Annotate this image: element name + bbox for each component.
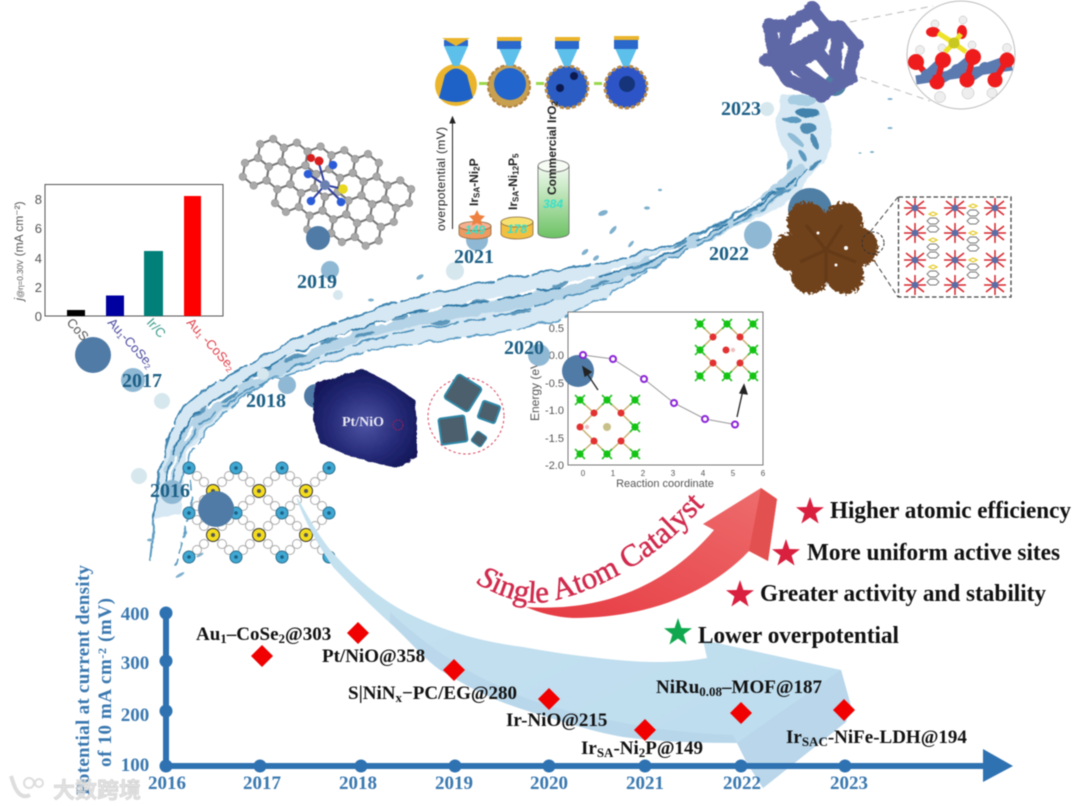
panel: 2020 energy chart	[528, 312, 766, 490]
year marker: 2018	[246, 368, 296, 412]
panel: 2020 energy chart: 0.5	[549, 323, 564, 335]
timeline chart axes: 2023	[830, 773, 868, 794]
timeline chart axes: 200	[121, 705, 149, 726]
bar chart: 2017: 0	[35, 309, 42, 324]
panel: 2019 molecule	[231, 131, 420, 256]
panel: 2020 energy chart: 5	[731, 469, 736, 478]
data labels: -Ni	[613, 738, 639, 759]
big blue arrow	[297, 497, 851, 788]
timeline chart axes: 2020	[530, 773, 568, 794]
y axis title: of 10 mA cm	[95, 659, 116, 767]
timeline chart axes: 2016	[148, 773, 186, 794]
y axis title: Potential at current density	[73, 564, 94, 795]
panel: 2020 energy chart: 6	[761, 469, 766, 478]
data labels	[196, 624, 967, 760]
panel: 2021 spheres and cylinders: Ir	[467, 198, 481, 206]
panel: 2021 spheres and cylinders	[434, 36, 647, 251]
panel: 2016 lattice	[183, 462, 335, 563]
bar chart: 2017: Au	[105, 315, 127, 337]
panel: 2020 energy chart: 0.0	[549, 350, 564, 362]
bar chart: 2017: 4	[35, 251, 42, 266]
data labels: P@149	[645, 738, 703, 759]
panel: 2020 energy chart: -0.5	[545, 378, 564, 390]
data labels: Ir	[786, 727, 802, 748]
panel: Pt/NiO particle	[304, 369, 504, 468]
red arrow	[526, 488, 777, 618]
data labels: Au	[196, 624, 220, 645]
panel: 2020 energy chart: 0	[581, 469, 586, 478]
timeline chart axes: 2019	[435, 773, 473, 794]
data labels: –CoSe	[226, 624, 279, 645]
timeline chart axes	[121, 604, 1013, 794]
panel: 2020 energy chart: 1	[611, 469, 616, 478]
data labels: x	[395, 690, 402, 705]
panel: 2021 spheres and cylinders: -Ni	[467, 171, 481, 187]
data labels: SA	[597, 745, 614, 760]
data labels: 1	[220, 631, 227, 646]
y axis title: (mV)	[95, 598, 116, 647]
bar chart: 2017: Ir/C	[144, 315, 169, 341]
watermark	[11, 776, 141, 803]
bar chart: 2017: -CoSe	[118, 330, 154, 368]
panel: 2021 spheres and cylinders: 149	[465, 223, 485, 237]
data labels: –MOF@187	[721, 677, 823, 698]
panel: 2023 purple MOF	[759, 1, 1015, 109]
timeline chart axes: 400	[121, 604, 149, 625]
year marker: 2017: 2017	[122, 370, 162, 392]
data labels: 2	[279, 631, 285, 646]
timeline chart axes: 100	[121, 755, 149, 776]
year marker: 2022: 2022	[709, 243, 749, 265]
panel: 2021 spheres and cylinders: -Ni	[506, 175, 520, 191]
panel: 2021 spheres and cylinders: 384	[543, 197, 563, 211]
year marker: 2023: 2023	[721, 98, 761, 120]
panel: 2021 spheres and cylinders: 2	[550, 101, 560, 106]
data labels: @303	[285, 624, 331, 645]
bar chart: 2017: 2	[35, 280, 42, 295]
bar chart: 2017: CoSe	[64, 315, 97, 349]
year marker: 2020: 2020	[504, 337, 544, 359]
panel: 2021 spheres and cylinders: SA	[512, 191, 520, 202]
panel: 2020 energy chart: Energy (eV)	[528, 357, 542, 421]
bar chart: 2017: 8	[35, 192, 42, 207]
panel: 2021 spheres and cylinders: Ir	[506, 202, 520, 210]
panel: 2021 spheres and cylinders: overpotential (mV)	[434, 127, 448, 231]
benefit list	[664, 497, 1071, 649]
y axis title	[73, 564, 116, 795]
data labels: NiRu	[656, 677, 699, 698]
data labels: 0.08	[699, 684, 723, 699]
timeline chart axes: 2021	[626, 773, 664, 794]
benefit: lower overpotential: Lower overpotential	[698, 623, 899, 649]
bar chart: 2017: 1	[194, 331, 204, 341]
data points: red diamonds	[251, 622, 855, 741]
year marker: 2021: 2021	[454, 246, 494, 268]
timeline chart axes: 2017	[243, 773, 282, 794]
data labels: Ir-NiO@215	[506, 710, 607, 731]
year marker: 2016: 2016	[150, 480, 190, 502]
panel: 2020 energy chart: Reaction coordinate	[616, 478, 714, 490]
panel: 2021 spheres and cylinders: P	[506, 158, 520, 166]
timeline chart axes: 2018	[339, 773, 377, 794]
data labels: −PC/EG@280	[402, 683, 517, 704]
watermark: 大数跨境	[53, 778, 141, 803]
arrow label: Single Atom Catalyst: Single Atom Catalyst	[476, 494, 706, 609]
panel: 2020 energy chart: 4	[701, 469, 706, 478]
water splash stream	[147, 93, 892, 579]
data labels: Ir	[581, 738, 597, 759]
timeline chart axes: 300	[121, 653, 149, 674]
year marker: 2020	[504, 337, 550, 366]
panel: 2020 energy chart: 3	[671, 469, 676, 478]
year marker: 2022	[709, 221, 772, 265]
panel: 2020 energy chart: -2.0	[545, 460, 564, 472]
panel: 2021 spheres and cylinders: SA	[472, 187, 482, 198]
panel: 2021 spheres and cylinders: 2	[472, 166, 482, 171]
panel: 2020 energy chart: -1.0	[545, 405, 564, 417]
bar chart: 2017: j@η=0.30V (mA cm⁻²)	[12, 201, 26, 303]
year marker: 2017	[75, 337, 170, 409]
panel: Pt/NiO particle: Pt/NiO	[342, 415, 384, 430]
data labels: -NiFe-LDH@194	[828, 727, 967, 748]
year marker: 2019	[297, 226, 343, 300]
panel: 2021 spheres and cylinders: 178	[507, 222, 527, 236]
data labels: S|NiN	[348, 683, 395, 704]
bar chart: 2017: 2	[224, 365, 234, 375]
panel: 2021 spheres and cylinders: Commercial IrO	[545, 106, 559, 195]
panel: 2022 brown MOF	[773, 188, 1011, 297]
bar chart: 2017: -CoSe	[197, 330, 236, 370]
bar chart: 2017: Au	[184, 315, 206, 337]
benefit: higher atomic efficiency: Higher atomic efficiency	[830, 498, 1071, 524]
year marker: 2019: 2019	[297, 271, 337, 293]
timeline chart axes: 2022	[723, 773, 761, 794]
panel: 2020 energy chart: -1.5	[545, 433, 564, 445]
bar chart: 2017: 6	[35, 221, 42, 236]
benefit: uniform active sites: More uniform active sites	[807, 540, 1060, 566]
panel: 2021 spheres and cylinders: 5	[512, 153, 520, 158]
data labels: Pt/NiO@358	[322, 646, 425, 667]
benefit: activity and stability: Greater activity and stability	[760, 581, 1046, 607]
panel: 2021 spheres and cylinders: P	[467, 158, 481, 166]
bar chart: 2017: 2	[85, 344, 95, 354]
year marker: 2018: 2018	[246, 390, 286, 412]
panel: 2021 spheres and cylinders: 12	[512, 165, 520, 175]
data labels: SAC	[802, 734, 828, 749]
bar chart: 2017: 2	[142, 362, 152, 372]
bar chart: 2017	[12, 184, 239, 375]
data labels: 2	[639, 745, 645, 760]
panel: 2020 energy chart: 2	[641, 469, 646, 478]
year marker: 2016	[131, 468, 234, 527]
year marker: 2021	[446, 246, 494, 280]
bar chart: 2017: 1	[115, 331, 125, 341]
y axis title: -2	[95, 648, 109, 659]
